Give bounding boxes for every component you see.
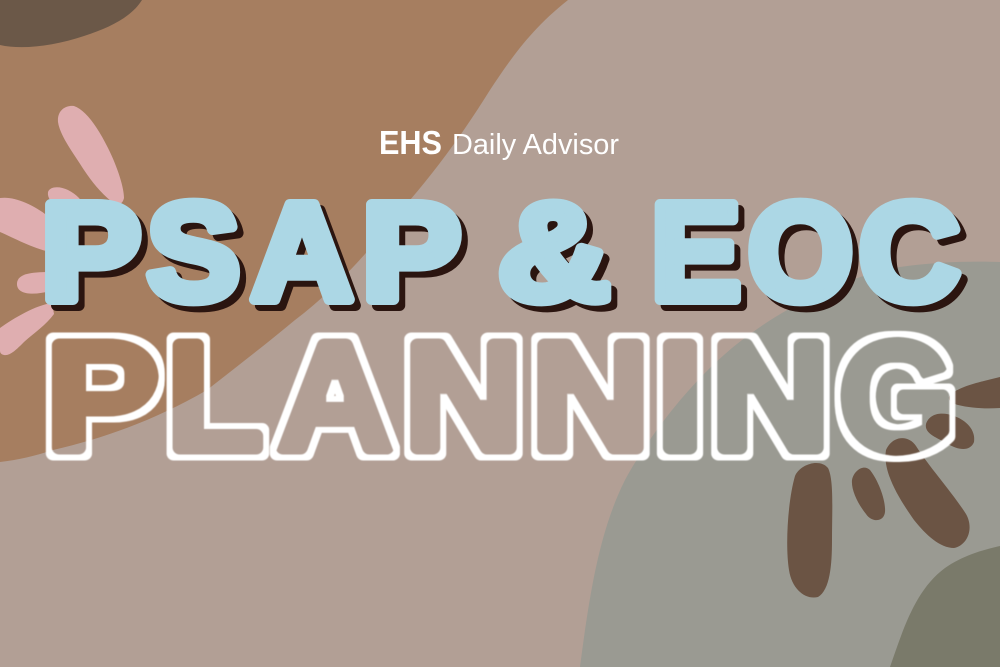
title: PLANNING outlined: G [838,310,955,484]
title shadow: PSAP & EOC: E [657,182,747,336]
title: PLANNING outlined: N [404,310,524,484]
title: PLANNING outlined: L [166,310,264,484]
shape: dark green blob [890,546,1000,667]
shape: dark top-left blob [0,0,142,47]
brand line: EHS Daily Advisor: EHS [379,124,442,161]
title: PLANNING outlined: P [45,310,160,484]
title: PSAP & EOC: O [748,176,853,330]
icon: brown flower petals [787,377,1000,598]
brand line: EHS Daily Advisor: Daily Advisor [452,129,619,161]
title: PLANNING outlined: N [710,310,830,484]
title: PSAP & EOC: A [251,176,353,330]
title shadow: PSAP & EOC [47,182,966,336]
title: PLANNING outlined [45,310,955,484]
title: PLANNING outlined: N [530,310,650,484]
title shadow: PSAP & EOC: O [754,182,859,336]
title: PSAP & EOC: E [651,176,741,330]
title shadow: PSAP & EOC: P [47,182,147,336]
title shadow: PSAP & EOC: P [368,182,467,336]
title shadow: PSAP & EOC: & [504,182,616,336]
brand line: EHS Daily Advisor [379,124,619,161]
icon: pink flower petals [0,106,124,355]
title: PSAP & EOC: & [498,176,610,330]
title shadow: PSAP & EOC: A [257,182,359,336]
shape: brown blob [0,0,568,462]
title shadow: PSAP & EOC: S [153,182,246,336]
title: PLANNING outlined: I [656,310,704,484]
title: PSAP & EOC [41,176,960,330]
title: PSAP & EOC: P [41,176,141,330]
title: PLANNING outlined: A [276,310,394,484]
shape: grey-green blob [580,262,1000,667]
title shadow: PSAP & EOC: C [865,182,966,336]
title: PSAP & EOC: C [859,176,960,330]
title: PSAP & EOC: S [147,176,240,330]
title: PSAP & EOC: P [362,176,461,330]
